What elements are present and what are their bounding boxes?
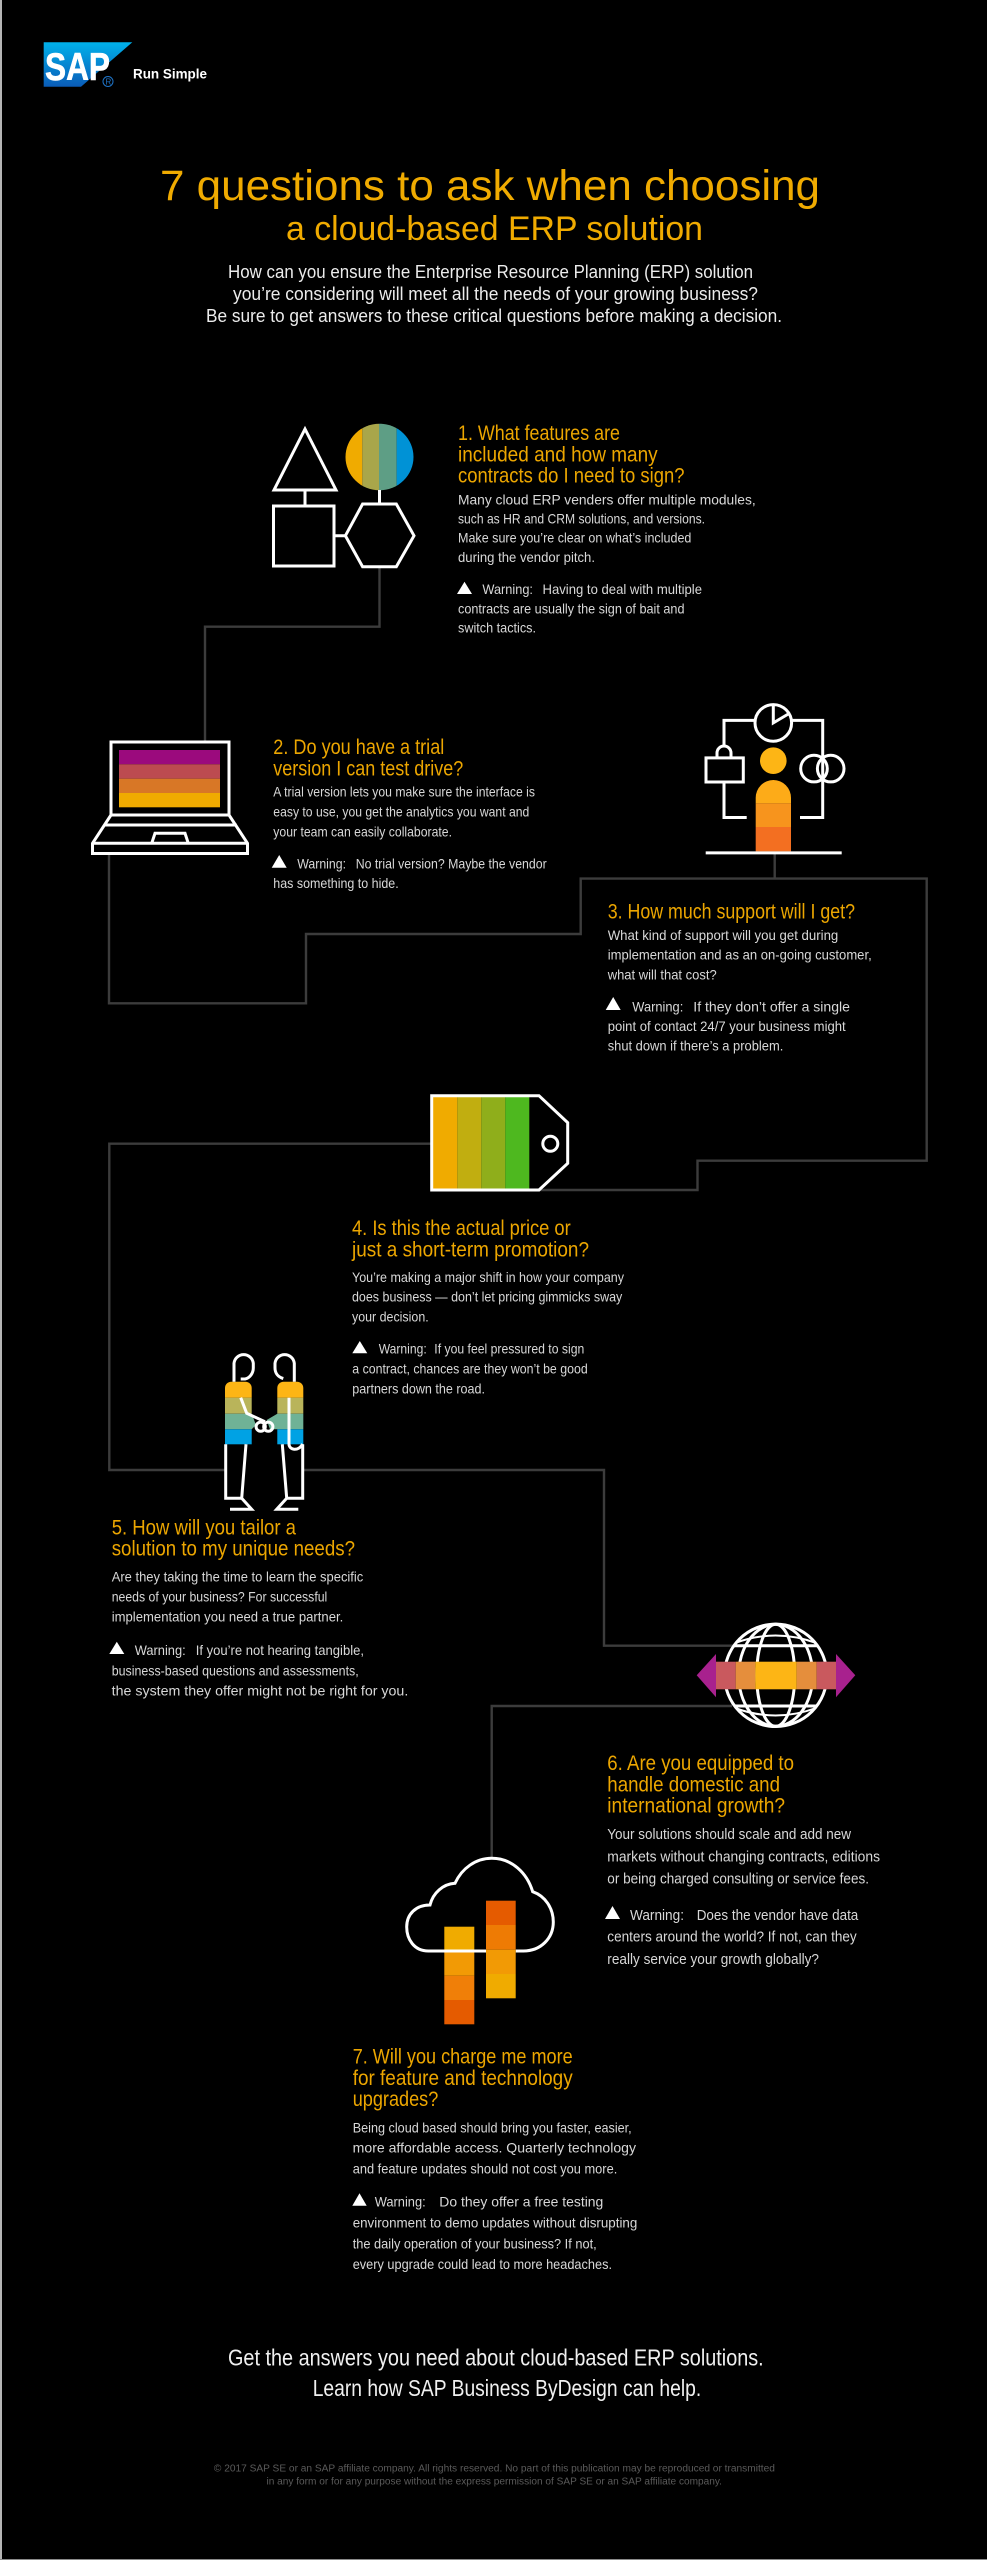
body text: [607, 1826, 880, 1887]
copyright: in any form or for any purpose without the express permission of SAP SE or an SAP affiliate company.: [266, 2477, 722, 2488]
body text: [607, 927, 872, 982]
logo: SAP Run Simple: [44, 42, 207, 89]
heading: 7. Will you charge me more: [353, 2045, 573, 2068]
body text: You’re making a major shift in how your company: [352, 1269, 624, 1285]
body text: Are they taking the time to learn the specific: [112, 1569, 363, 1585]
title: a cloud-based ERP solution: [286, 210, 703, 248]
body text: implementation and as an on-going customer,: [608, 947, 872, 963]
body text: your team can easily collaborate.: [273, 823, 452, 839]
warning: has something to hide.: [273, 875, 399, 891]
warning: environment to demo updates without disrupting: [353, 2215, 637, 2231]
body text: needs of your business? For successful: [112, 1589, 327, 1605]
heading: [273, 736, 463, 781]
warning: partners down the road.: [352, 1380, 485, 1396]
warning: Warning:: [297, 855, 346, 871]
warning: If you feel pressured to sign: [434, 1340, 584, 1356]
warning: Warning:: [630, 1907, 684, 1924]
title: 7 questions to ask when choosing: [160, 162, 820, 210]
intro text: Be sure to get answers to these critical questions before making a decision.: [206, 305, 782, 326]
body text: A trial version lets you make sure the interface is: [273, 784, 535, 800]
title: [160, 162, 820, 248]
warning: really service your growth globally?: [607, 1951, 819, 1968]
warning: Having to deal with multiple: [542, 581, 702, 597]
panel: question 4: [351, 1096, 624, 1396]
body text: [353, 2119, 636, 2176]
warning: the system they offer might not be right for you.: [112, 1683, 408, 1699]
warning: business-based questions and assessments,: [112, 1662, 359, 1678]
heading: handle domestic and: [607, 1774, 780, 1797]
warning: the daily operation of your business? If not,: [353, 2235, 597, 2251]
copyright: © 2017 SAP SE or an SAP affiliate company. All rights reserved. No part of this publication may be reproduced or transmitted: [214, 2464, 775, 2475]
warning: every upgrade could lead to more headaches.: [353, 2256, 612, 2272]
heading: 5. How will you tailor a: [112, 1516, 296, 1539]
warning: Warning:: [375, 2194, 426, 2210]
body text: Being cloud based should bring you faster, easier,: [353, 2119, 632, 2135]
icon: shapes: [274, 423, 414, 567]
warning: If they don’t offer a single: [693, 998, 850, 1014]
heading: 2. Do you have a trial: [273, 736, 444, 759]
heading: 3. How much support will I get?: [608, 901, 855, 924]
intro text: How can you ensure the Enterprise Resource Planning (ERP) solution: [228, 261, 753, 282]
heading: 1. What features are: [458, 422, 620, 445]
warning: switch tactics.: [458, 619, 536, 635]
icon: handshake: [225, 1355, 303, 1509]
warning: [606, 997, 850, 1054]
warning: [457, 581, 702, 635]
warning: [352, 1340, 588, 1396]
call to action: Learn how SAP Business ByDesign can help.: [313, 2375, 701, 2401]
body text: and feature updates should not cost you more.: [353, 2160, 617, 2176]
body text: markets without changing contracts, editions: [607, 1849, 880, 1866]
heading: upgrades?: [353, 2088, 438, 2111]
body text: implementation you need a true partner.: [112, 1609, 343, 1625]
heading: included and how many: [458, 444, 658, 467]
body text: [112, 1569, 363, 1625]
warning: shut down if there’s a problem.: [608, 1038, 783, 1054]
heading: [607, 1752, 794, 1818]
warning: Warning:: [632, 998, 683, 1014]
warning: centers around the world? If not, can they: [607, 1929, 857, 1946]
icon: support person: [706, 705, 844, 853]
warning: [109, 1642, 408, 1699]
icon: SAP logo mark: SAP: [45, 46, 110, 89]
panel: question 7: [352, 1858, 637, 2272]
panel: question 3: [606, 705, 872, 1054]
panel: question 5: [109, 1355, 408, 1699]
warning: contracts are usually the sign of bait and: [458, 600, 684, 616]
heading: for feature and technology: [353, 2067, 573, 2090]
intro text: [206, 261, 782, 326]
body text: such as HR and CRM solutions, and versions.: [458, 511, 705, 527]
body text: does business — don’t let pricing gimmicks sway: [352, 1289, 622, 1305]
heading: [112, 1516, 355, 1561]
tagline: Run Simple: [133, 65, 207, 81]
heading: solution to my unique needs?: [112, 1538, 355, 1561]
heading: version I can test drive?: [273, 758, 463, 781]
heading: [353, 2045, 573, 2111]
warning: No trial version? Maybe the vendor: [356, 855, 547, 871]
warning: [272, 855, 547, 891]
heading: contracts do I need to sign?: [458, 465, 684, 488]
heading: [351, 1217, 589, 1262]
call to action: Get the answers you need about cloud-based ERP solutions.: [228, 2345, 764, 2371]
warning: Does the vendor have data: [697, 1907, 859, 1924]
body text: Many cloud ERP venders offer multiple modules,: [458, 491, 756, 507]
panel: question 1: [274, 422, 756, 635]
heading: international growth?: [607, 1795, 785, 1818]
body text: Your solutions should scale and add new: [607, 1826, 851, 1843]
icon: price tag: [432, 1096, 568, 1190]
icon: globe with arrow: [697, 1624, 855, 1727]
warning: Warning:: [482, 581, 533, 597]
warning: Warning:: [135, 1642, 186, 1658]
body text: during the vendor pitch.: [458, 549, 595, 565]
icon: laptop: [92, 742, 248, 854]
body text: your decision.: [352, 1309, 429, 1325]
body text: Make sure you’re clear on what’s included: [458, 530, 691, 546]
warning: [605, 1906, 859, 1968]
body text: [273, 784, 535, 839]
body text: [352, 1269, 624, 1325]
call to action: [228, 2345, 764, 2401]
body text: or being charged consulting or service fees.: [607, 1870, 869, 1887]
copyright: [214, 2464, 775, 2488]
body text: [458, 491, 756, 565]
heading: 4. Is this the actual price or: [352, 1217, 571, 1240]
intro text: you’re considering will meet all the needs of your growing business?: [233, 283, 758, 304]
warning: Do they offer a free testing: [439, 2194, 603, 2210]
heading: [458, 422, 684, 488]
warning: a contract, chances are they won’t be good: [352, 1360, 588, 1376]
warning: If you’re not hearing tangible,: [196, 1642, 364, 1658]
warning: point of contact 24/7 your business might: [608, 1018, 846, 1034]
heading: 6. Are you equipped to: [607, 1752, 794, 1775]
warning: [352, 2193, 637, 2272]
heading: just a short-term promotion?: [351, 1239, 589, 1262]
icon: SAP logo mark: R: [106, 78, 112, 86]
body text: more affordable access. Quarterly technology: [353, 2140, 636, 2156]
body text: easy to use, you get the analytics you want and: [273, 804, 529, 820]
panel: question 6: [605, 1624, 880, 1968]
warning: Warning:: [379, 1340, 427, 1356]
connector line: [109, 567, 927, 1858]
body text: what will that cost?: [607, 966, 717, 982]
icon: cloud with bars: [407, 1858, 553, 2024]
panel: question 2: [92, 736, 547, 891]
body text: What kind of support will you get during: [608, 927, 838, 943]
